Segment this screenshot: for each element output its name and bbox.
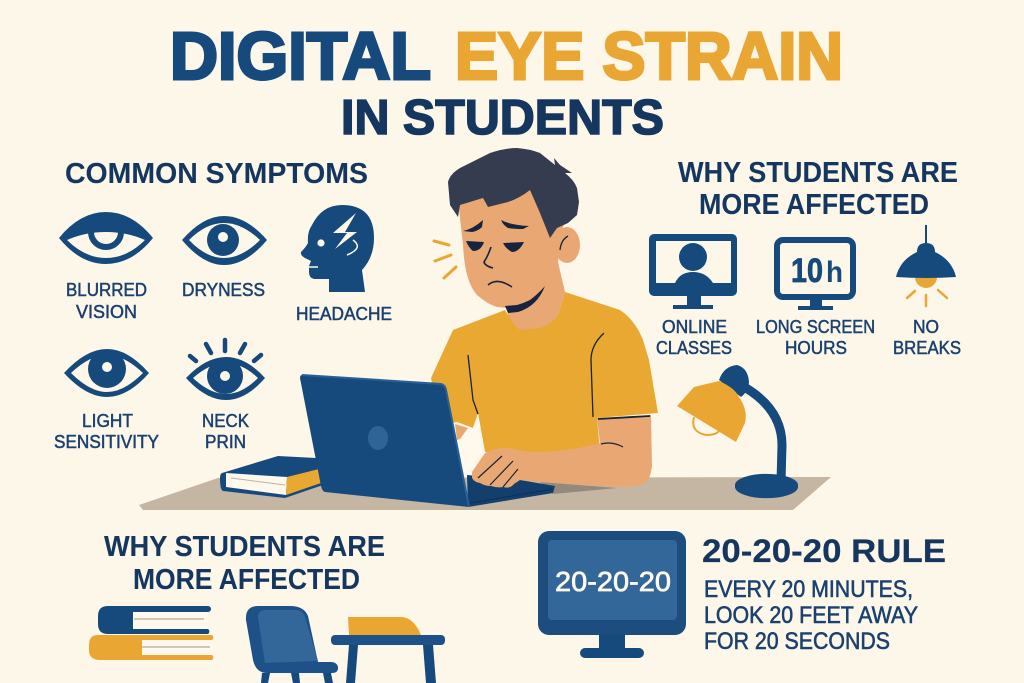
- panel: common symptoms: [54, 158, 392, 452]
- text: rule description: EVERY 20 MINUTES,: [704, 576, 913, 603]
- label: long screen hours: [756, 317, 875, 358]
- desk: [139, 477, 831, 510]
- label: dryness: DRYNESS: [182, 280, 265, 300]
- label: light sensitivity: SENSITIVITY: [54, 432, 159, 452]
- icon: monitor: 20-20-20: [555, 566, 671, 597]
- icon: no breaks lamp: [896, 225, 956, 306]
- icon: online classes monitor: [649, 234, 737, 309]
- icon: dryness eye: [182, 216, 267, 265]
- illustration: student at desk: [139, 148, 831, 510]
- strain sparks: [434, 241, 456, 278]
- shirt: [431, 292, 658, 452]
- label: blurred vision: BLURRED: [66, 280, 147, 300]
- label: neck pain: NECK: [202, 411, 249, 431]
- label: blurred vision: VISION: [76, 302, 137, 322]
- desk shadow: [540, 482, 617, 494]
- label: neck pain: [202, 411, 249, 452]
- icon: table with book: [331, 617, 445, 683]
- heading: why students are more affected: WHY STUDENTS ARE: [104, 531, 385, 563]
- label: online classes: [656, 317, 732, 358]
- heading: why students are more affected: WHY STUDENTS ARE: [678, 157, 958, 189]
- panel: why students are more affected (right): [649, 157, 961, 358]
- hair: [448, 148, 579, 238]
- title: IN STUDENTS: [341, 91, 664, 145]
- chin shadow: [505, 286, 545, 313]
- icon: light sensitivity eye: [64, 349, 149, 397]
- heading: 20-20-20 rule: 20-20-20 RULE: [702, 533, 946, 569]
- icon: neck pain eye with rays: [186, 340, 265, 400]
- text: rule description: [704, 576, 918, 655]
- heading: why students are more affected: [678, 157, 958, 221]
- arm and hand: [472, 415, 652, 488]
- heading: why students are more affected: [104, 531, 385, 596]
- label: neck pain: PRIN: [205, 432, 246, 452]
- label: online classes: ONLINE: [662, 317, 727, 337]
- icon: long screen hours monitor: h: [826, 256, 843, 289]
- eyebrows: [463, 220, 529, 232]
- icon: blurred vision eye: [59, 212, 153, 264]
- title: [170, 19, 843, 145]
- text: rule description: LOOK 20 FEET AWAY: [704, 602, 918, 629]
- label: no breaks: BREAKS: [893, 338, 961, 358]
- label: blurred vision: [66, 280, 147, 322]
- icon: stack of books: [89, 606, 213, 660]
- text: rule description: FOR 20 SECONDS: [704, 628, 890, 655]
- desk lamp: [677, 365, 798, 498]
- panel: 20-20-20 rule: [538, 531, 946, 658]
- icon: headache head: [301, 205, 374, 292]
- title: DIGITAL: [170, 19, 431, 94]
- icon: long screen hours monitor: 10: [791, 252, 823, 290]
- label: long screen hours: HOURS: [785, 338, 847, 358]
- laptop: [300, 375, 555, 507]
- label: light sensitivity: [54, 411, 159, 452]
- icon: monitor: [538, 531, 686, 658]
- heading: common symptoms: COMMON SYMPTOMS: [65, 158, 368, 190]
- heading: why students are more affected: MORE AFFECTED: [133, 564, 360, 596]
- label: light sensitivity: LIGHT: [82, 411, 133, 431]
- label: long screen hours: LONG SCREEN: [756, 317, 875, 337]
- book on desk: [220, 456, 323, 498]
- panel: why students are more affected (bottom): [89, 531, 445, 683]
- skin and gap beside the laptop: [455, 414, 485, 480]
- label: online classes: CLASSES: [656, 338, 732, 358]
- label: no breaks: [893, 317, 961, 358]
- title: EYE STRAIN: [455, 19, 843, 94]
- icon: chair: [246, 606, 338, 683]
- heading: why students are more affected: MORE AFFECTED: [699, 189, 929, 221]
- eyes: [466, 241, 524, 252]
- label: headache: HEADACHE: [296, 304, 392, 324]
- mouth: [488, 281, 512, 287]
- nose: [484, 247, 493, 268]
- neck and face: [458, 170, 580, 330]
- label: no breaks: NO: [913, 317, 939, 337]
- icon: long screen hours monitor: [777, 240, 853, 310]
